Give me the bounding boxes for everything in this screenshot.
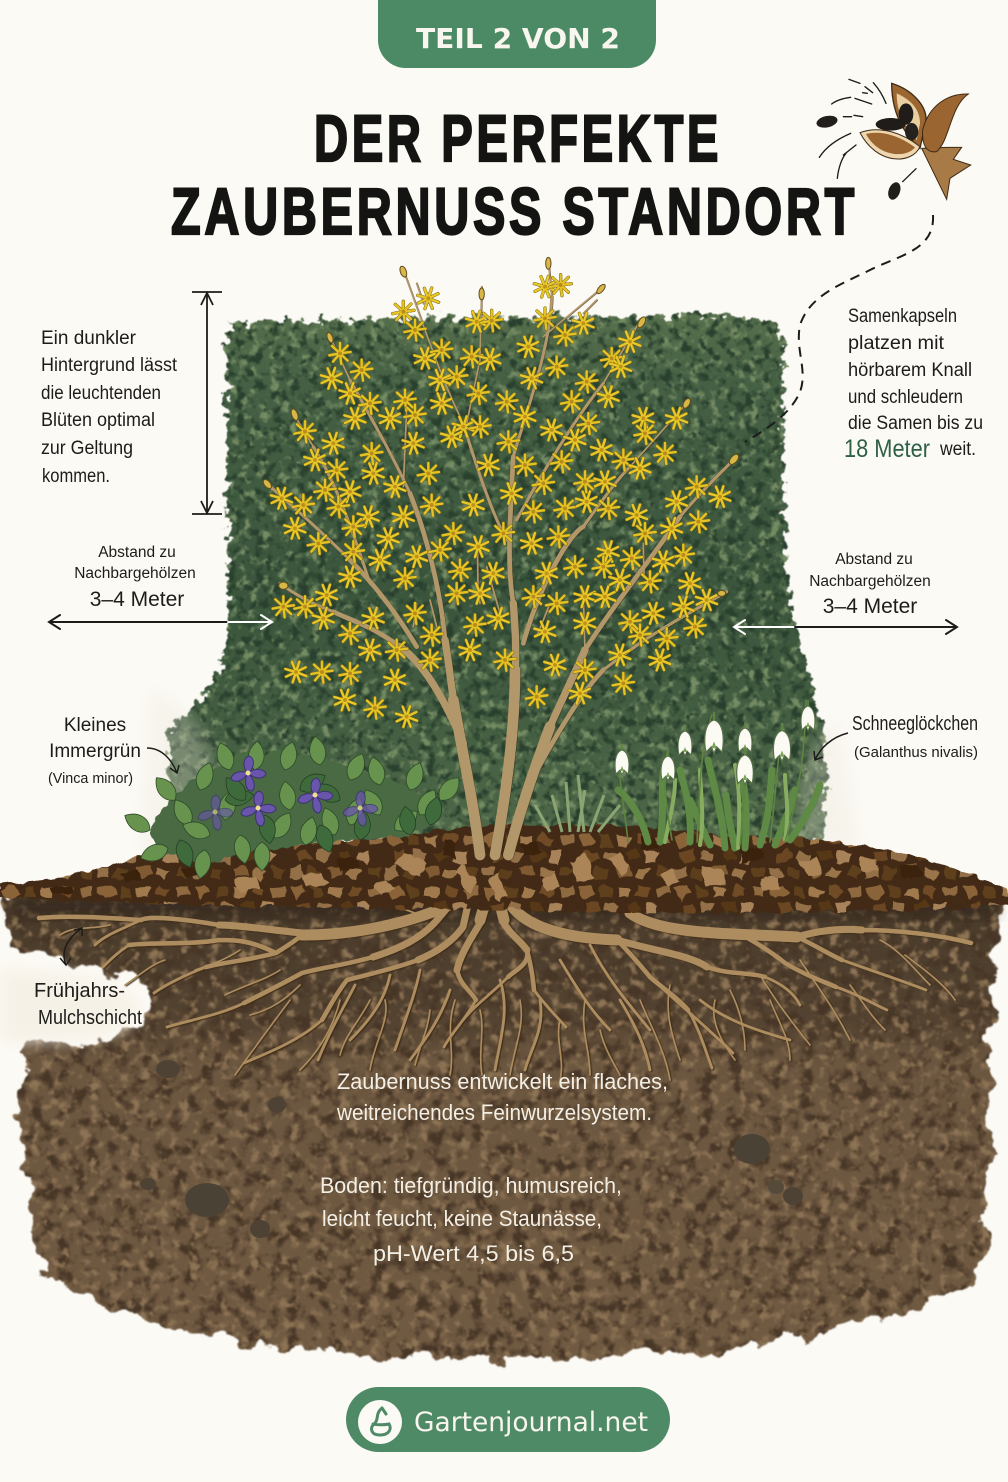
label: Schneeglöckchen: Schneeglöckchen (852, 713, 978, 735)
label: Frühjahrs-Mulchschicht (34, 928, 142, 1029)
text: seed pod note: 18 Meter (844, 435, 930, 463)
hedge lower-edge fade (140, 690, 860, 850)
right spacing note: 3–4 Meter (823, 595, 917, 618)
text: seed pod note: weit. (939, 439, 976, 460)
mulch chips (50, 835, 922, 901)
text: dark background note: kommen. (42, 466, 110, 487)
periwinkle flowers (198, 756, 378, 830)
label: Kleines Immergrün: Immergrün (49, 741, 141, 762)
left spacing note: Abstand zu (98, 544, 176, 561)
soil note: soil requirements: Boden: tiefgründig, humusreich, (320, 1173, 622, 1198)
label: Frühjahrs-Mulchschicht: Mulchschicht (38, 1007, 142, 1029)
soil: upper and lower profile (8, 892, 1001, 1360)
left spacing arrow (49, 615, 272, 629)
right spacing arrow (734, 620, 957, 634)
left spacing note (74, 544, 196, 611)
text: dark background note: zur Geltung (41, 438, 133, 459)
text: seed pod note: hörbarem Knall (848, 360, 972, 381)
periwinkle foliage mass (150, 753, 441, 860)
text: seed pod note: die Samen bis zu (848, 413, 983, 434)
height dimension arrow (192, 292, 222, 514)
icon: garden logo (358, 1400, 402, 1444)
text: dark background note: Hintergrund lässt (41, 355, 178, 376)
flower buds (262, 257, 740, 596)
soil note: soil requirements: leicht feucht, keine Staunässe, (322, 1206, 602, 1231)
label: Schneeglöckchen: (Galanthus nivalis) (854, 744, 978, 761)
label patch behind mulch label (0, 968, 140, 1042)
label: Kleines Immergrün: (Vinca minor) (48, 770, 133, 787)
roots (39, 893, 971, 1080)
left spacing note: 3–4 Meter (90, 588, 184, 611)
right spacing note (809, 551, 931, 618)
left spacing note: Nachbargehölzen (74, 565, 196, 582)
plant: snowdrops (615, 700, 820, 848)
soil note: root system: Zaubernuss entwickelt ein flaches, (337, 1069, 668, 1094)
dashed arrow path of seed flight (745, 215, 933, 442)
text: dark background note: Blüten optimal (41, 410, 155, 431)
text: dark background note (41, 328, 178, 487)
soil note: root system (336, 1069, 668, 1125)
text: seed pod note: Samenkapseln (848, 306, 957, 327)
hedge background (168, 316, 827, 842)
badge: part indicator: TEIL 2 VON 2 (416, 22, 620, 55)
right spacing note: Nachbargehölzen (809, 573, 931, 590)
icon: bursting seed pod (815, 79, 971, 201)
footer badge (346, 1387, 670, 1452)
label: Frühjahrs-Mulchschicht: Frühjahrs- (34, 980, 125, 1002)
periwinkle dark leaves (173, 769, 445, 870)
label: Kleines Immergrün: Kleines (64, 715, 126, 736)
title: DER PERFEKTE (314, 101, 722, 175)
text: dark background note: Ein dunkler (41, 328, 137, 349)
plant: periwinkle ground cover (121, 735, 465, 880)
title (171, 101, 858, 248)
text: seed pod note (844, 306, 983, 463)
text: dark background note: die leuchtenden (41, 383, 161, 404)
periwinkle light leaves (121, 735, 465, 880)
text: seed pod note: platzen mit (848, 333, 945, 354)
shrub branches (267, 260, 737, 855)
soil stones (140, 1060, 803, 1238)
right spacing note: Abstand zu (835, 551, 913, 568)
witch hazel shrub (262, 257, 740, 855)
snowdrop blossoms (615, 700, 815, 785)
site name: Gartenjournal.net (414, 1407, 648, 1438)
text: seed pod note: und schleudern (848, 387, 963, 408)
mulch layer (0, 825, 1008, 913)
label: Schneeglöckchen (814, 713, 978, 761)
yellow flowers (271, 275, 730, 727)
soil note: soil requirements: pH-Wert 4,5 bis 6,5 (373, 1241, 574, 1266)
badge: part indicator (378, 0, 656, 68)
soil note: soil requirements (320, 1173, 622, 1266)
label: Kleines Immergrün (48, 715, 179, 787)
plant: grass tuft (535, 775, 620, 832)
soil shadow below mulch (15, 896, 995, 918)
soil note: root system: weitreichendes Feinwurzelsystem. (336, 1100, 652, 1125)
